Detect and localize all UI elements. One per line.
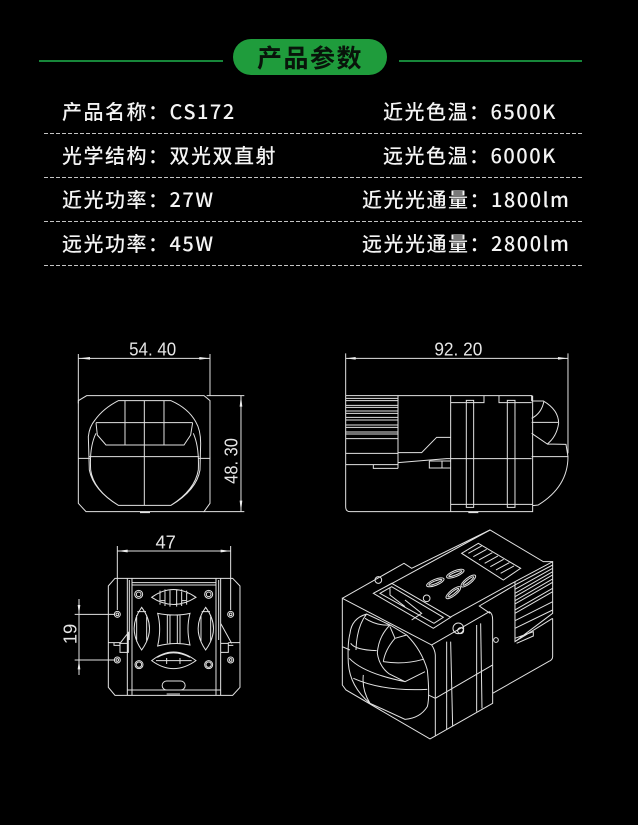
dimension 19: 19 xyxy=(60,624,81,644)
spec row 1: 近光色温：6500K xyxy=(383,96,557,125)
mounting holes xyxy=(114,590,234,669)
spec row 2: 远光色温：6000K xyxy=(383,140,557,169)
rear lenses and slot xyxy=(134,589,213,690)
lens xyxy=(348,614,429,719)
spec row 3 xyxy=(62,184,570,213)
spec row 4 xyxy=(62,228,570,257)
spec row 4: 远光功率：45W xyxy=(62,228,215,257)
dimension 92.20 xyxy=(346,339,568,453)
side body outline xyxy=(346,396,568,513)
top ovals xyxy=(375,567,498,642)
spec row 1 xyxy=(62,96,557,125)
spec row 4: 远光光通量：2800lm xyxy=(362,228,570,257)
body outline xyxy=(342,530,553,739)
spec row 2 xyxy=(62,140,557,169)
dimension 48.30 xyxy=(203,396,244,512)
title pill: 产品参数 xyxy=(257,39,363,75)
heading line right xyxy=(399,60,582,62)
lens front outline xyxy=(78,396,210,513)
dimension 54.40 xyxy=(78,339,210,403)
heading line left xyxy=(39,60,223,62)
top plate and vents xyxy=(373,530,521,628)
isometric view of the lamp module xyxy=(342,530,553,739)
dimension 47 xyxy=(117,531,231,610)
dimension 19 xyxy=(60,599,115,675)
spec row 3: 近光光通量：1800lm xyxy=(362,184,570,213)
dimension 48.30: 48. 30 xyxy=(220,438,241,484)
heat sink fins xyxy=(515,562,553,643)
front view drawing with 54.40 and 48.30 dimensions xyxy=(78,339,244,513)
spec row 3: 近光功率：27W xyxy=(62,184,215,213)
dimension 54.40: 54. 40 xyxy=(129,339,176,360)
dimension 92.20: 92. 20 xyxy=(434,339,482,360)
side view drawing with 92.20 dimension xyxy=(346,339,568,513)
spec row 1: 产品名称：CS172 xyxy=(62,96,236,125)
title pill xyxy=(233,39,387,75)
rear view drawing with 47 and 19 dimensions xyxy=(60,531,240,695)
dimension 47: 47 xyxy=(155,531,176,552)
rear plate outline xyxy=(108,578,240,695)
spec row 2: 光学结构：双光双直射 xyxy=(62,140,277,169)
